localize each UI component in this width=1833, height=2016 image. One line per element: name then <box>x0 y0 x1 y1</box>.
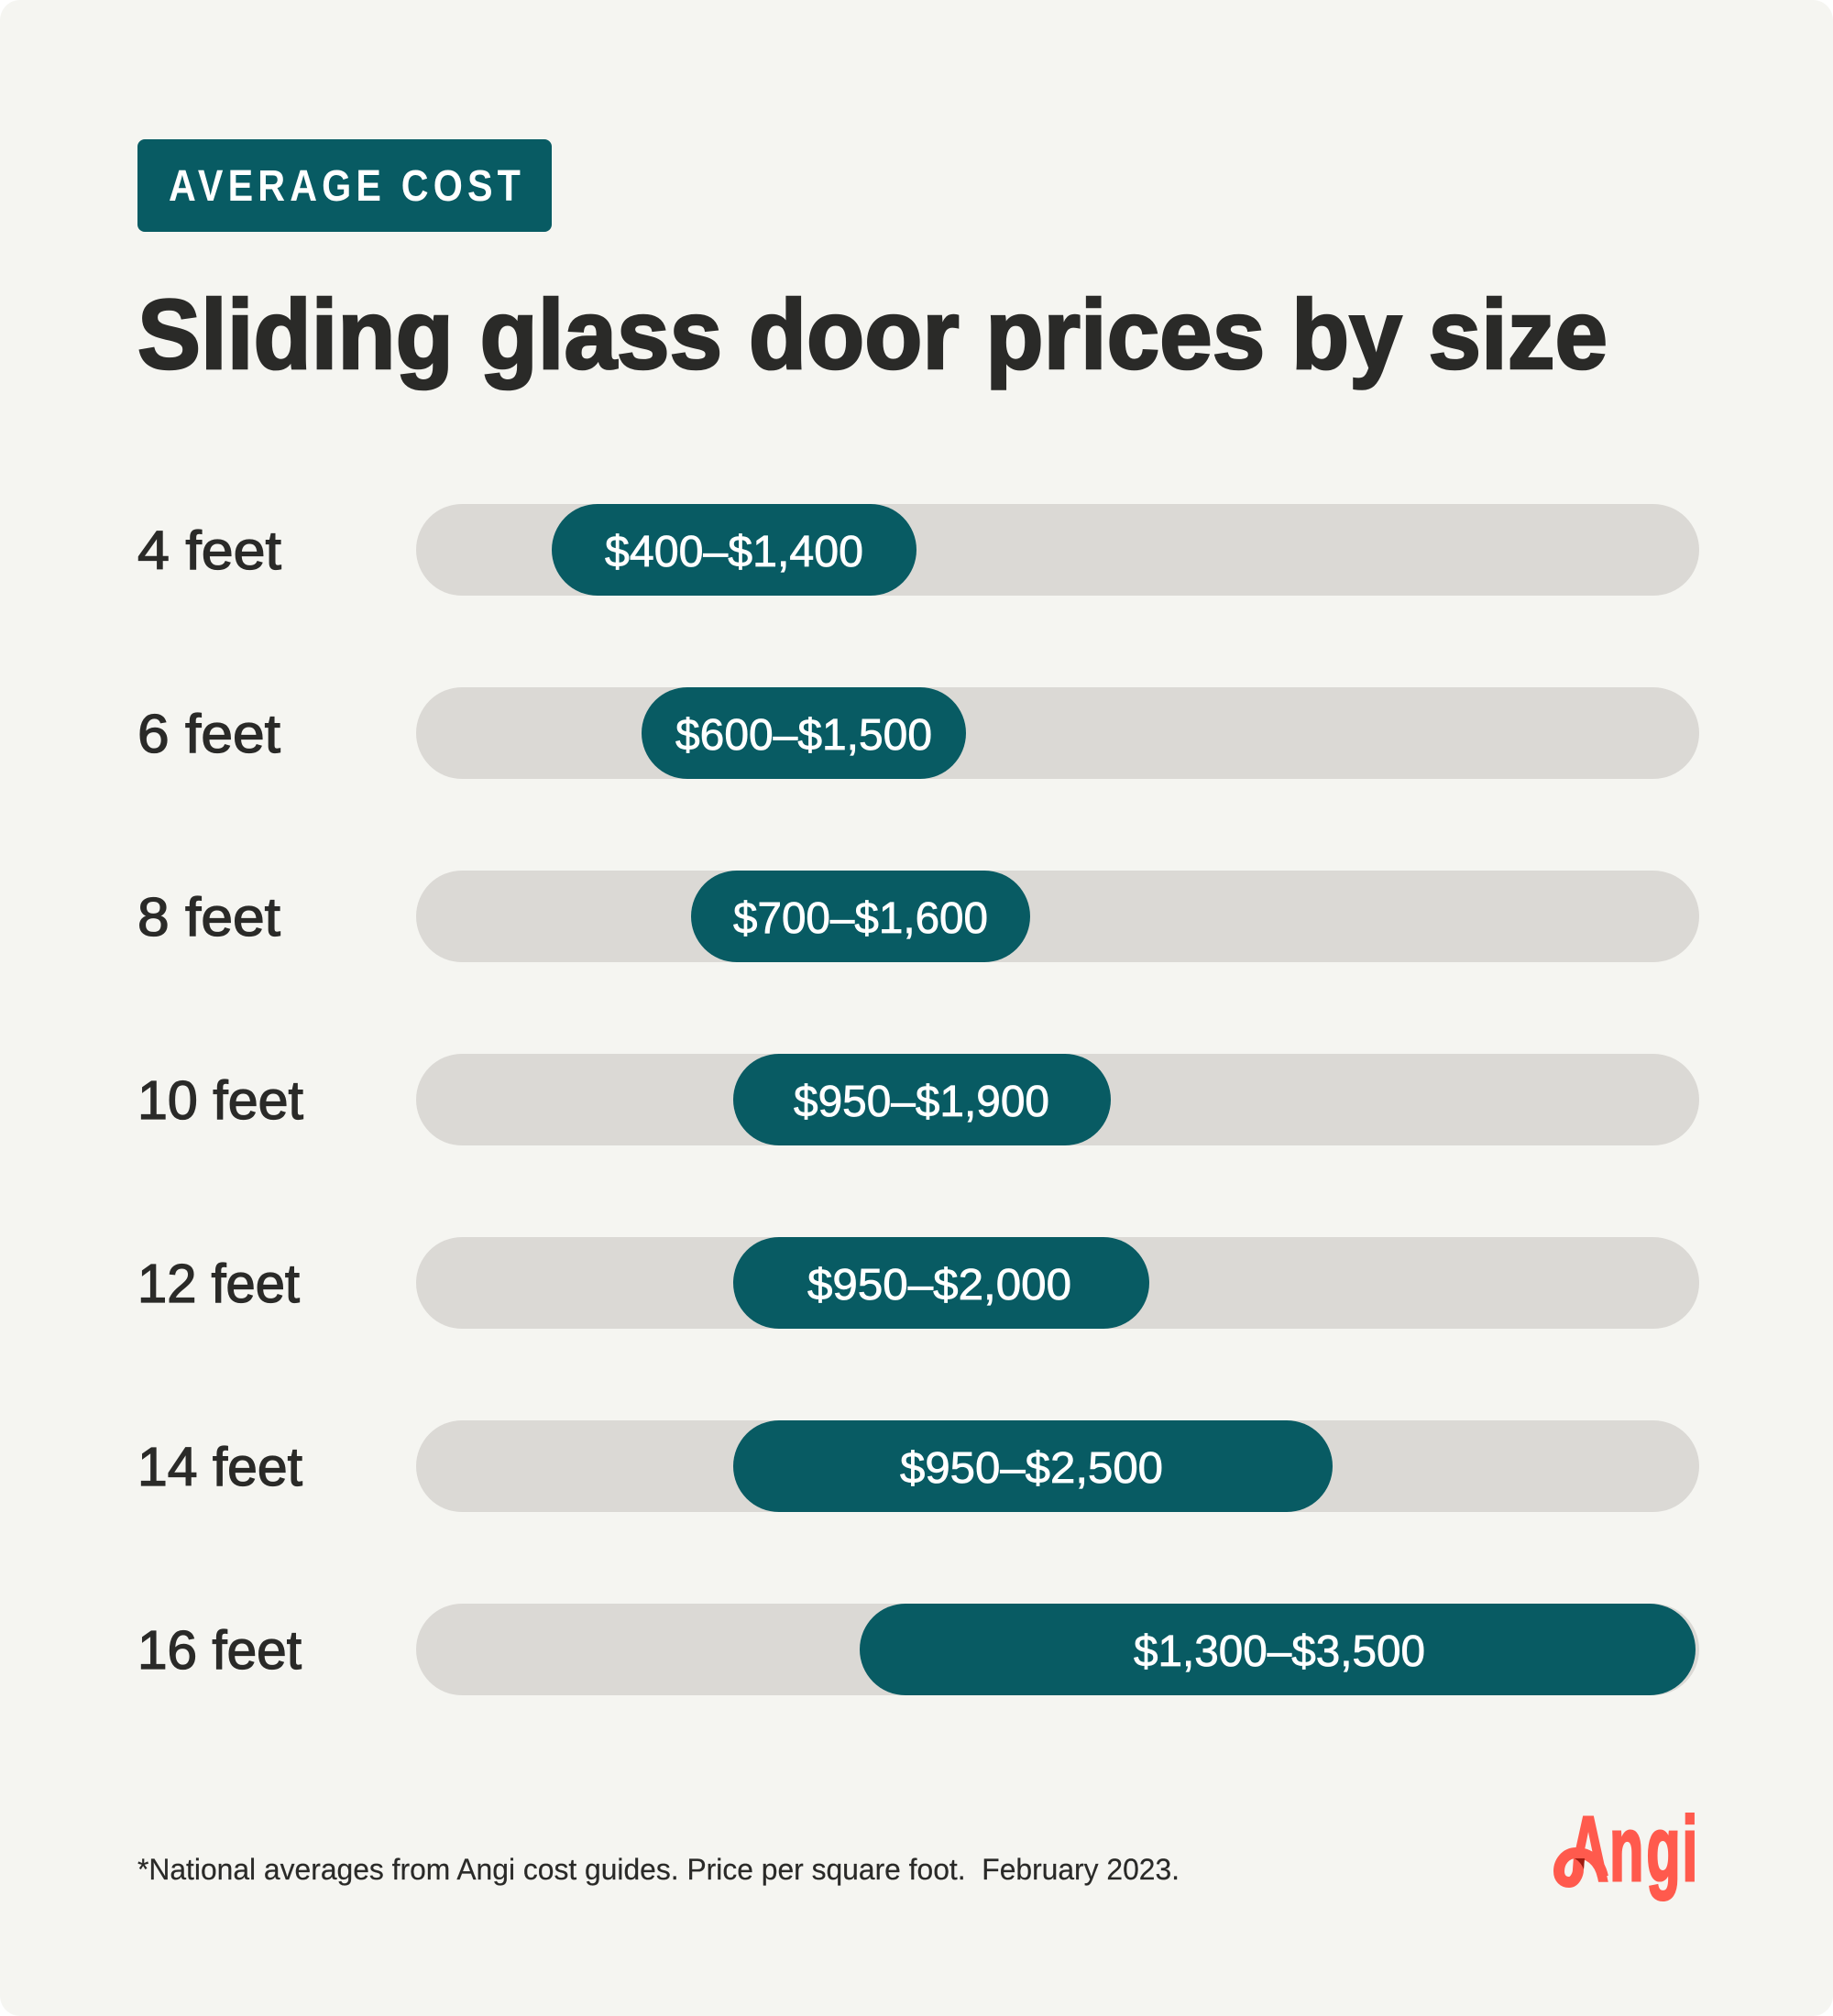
row: 16 feet <box>137 1604 1699 1695</box>
row: 16 feet: 16 feet <box>137 1620 302 1681</box>
row: 6 feet <box>137 687 1699 779</box>
row: 8 feet: $700–$1,600 <box>733 894 988 943</box>
row: 10 feet: $950–$1,900 <box>794 1078 1049 1126</box>
logo: Angi: Angi <box>1568 1797 1697 1901</box>
row: 10 feet <box>137 1054 1699 1145</box>
row: 14 feet: $950–$2,500 <box>900 1444 1163 1493</box>
row: 8 feet: 8 feet <box>137 887 280 948</box>
row: 12 feet: 12 feet <box>137 1254 300 1314</box>
row: 8 feet <box>137 871 1699 962</box>
footnote: *National averages from Angi cost guides. Price per square foot. February 2023. <box>137 1853 1180 1886</box>
row: 12 feet <box>137 1237 1699 1329</box>
row: 14 feet <box>137 1420 1699 1512</box>
row: 6 feet: 6 feet <box>137 704 280 764</box>
row: 16 feet: $1,300–$3,500 <box>1134 1627 1425 1676</box>
row: 4 feet <box>137 504 1699 596</box>
badge: average cost <box>137 139 552 232</box>
row: 4 feet: $400–$1,400 <box>605 528 863 576</box>
row: 12 feet: $950–$2,000 <box>807 1261 1071 1309</box>
badge: average cost: AVERAGE COST <box>169 162 525 211</box>
title: Sliding glass door prices by size <box>137 279 1608 389</box>
row: 10 feet: 10 feet <box>137 1070 303 1131</box>
row: 14 feet: 14 feet <box>137 1437 302 1497</box>
row: 6 feet: $600–$1,500 <box>675 711 932 760</box>
row: 4 feet: 4 feet <box>137 520 281 581</box>
